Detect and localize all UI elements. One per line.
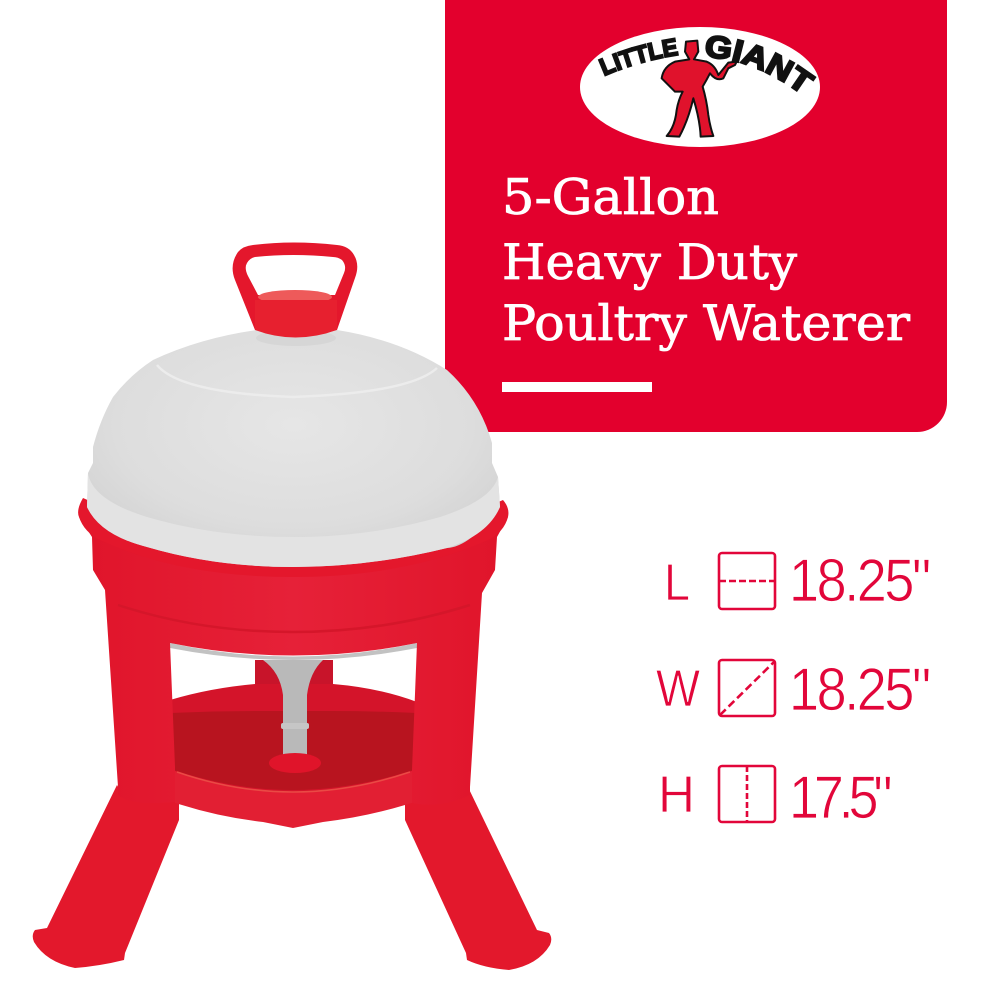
spec: width: W [656, 660, 700, 718]
logo: Little Giant: GIANT [705, 35, 817, 92]
back post [255, 660, 333, 690]
spec: height: 17.5" [789, 764, 893, 832]
grey underside [170, 643, 417, 660]
logo: Little Giant: LITTLE [598, 37, 679, 77]
handle [233, 242, 357, 330]
spec: height [658, 764, 892, 832]
nut [269, 753, 321, 773]
left leg foot [33, 785, 179, 968]
title [502, 169, 911, 352]
spec: height: H [658, 766, 695, 824]
panel: product header [445, 0, 947, 432]
legs upper and bowl [79, 517, 508, 805]
tray edge highlight [177, 772, 410, 792]
tray [170, 684, 417, 800]
bowl lip [78, 498, 508, 577]
title: Heavy Duty [502, 234, 797, 291]
logo: Little Giant [580, 27, 820, 147]
specs: dimensions [656, 547, 931, 832]
spec: width [656, 656, 931, 724]
stem [263, 660, 323, 757]
cap [255, 290, 337, 338]
title: Poultry Waterer [502, 295, 911, 352]
tray front band [175, 771, 412, 828]
title underline [502, 382, 652, 392]
product: poultry waterer [33, 242, 551, 970]
title: 5-Gallon [502, 169, 719, 226]
spec: length: L [664, 554, 690, 612]
bowl lower edge [118, 605, 470, 632]
spec: width: 18.25" [789, 656, 931, 724]
spec: length [664, 547, 931, 615]
dome [87, 330, 500, 567]
spec: length: 18.25" [789, 547, 931, 615]
right leg foot [405, 785, 551, 970]
